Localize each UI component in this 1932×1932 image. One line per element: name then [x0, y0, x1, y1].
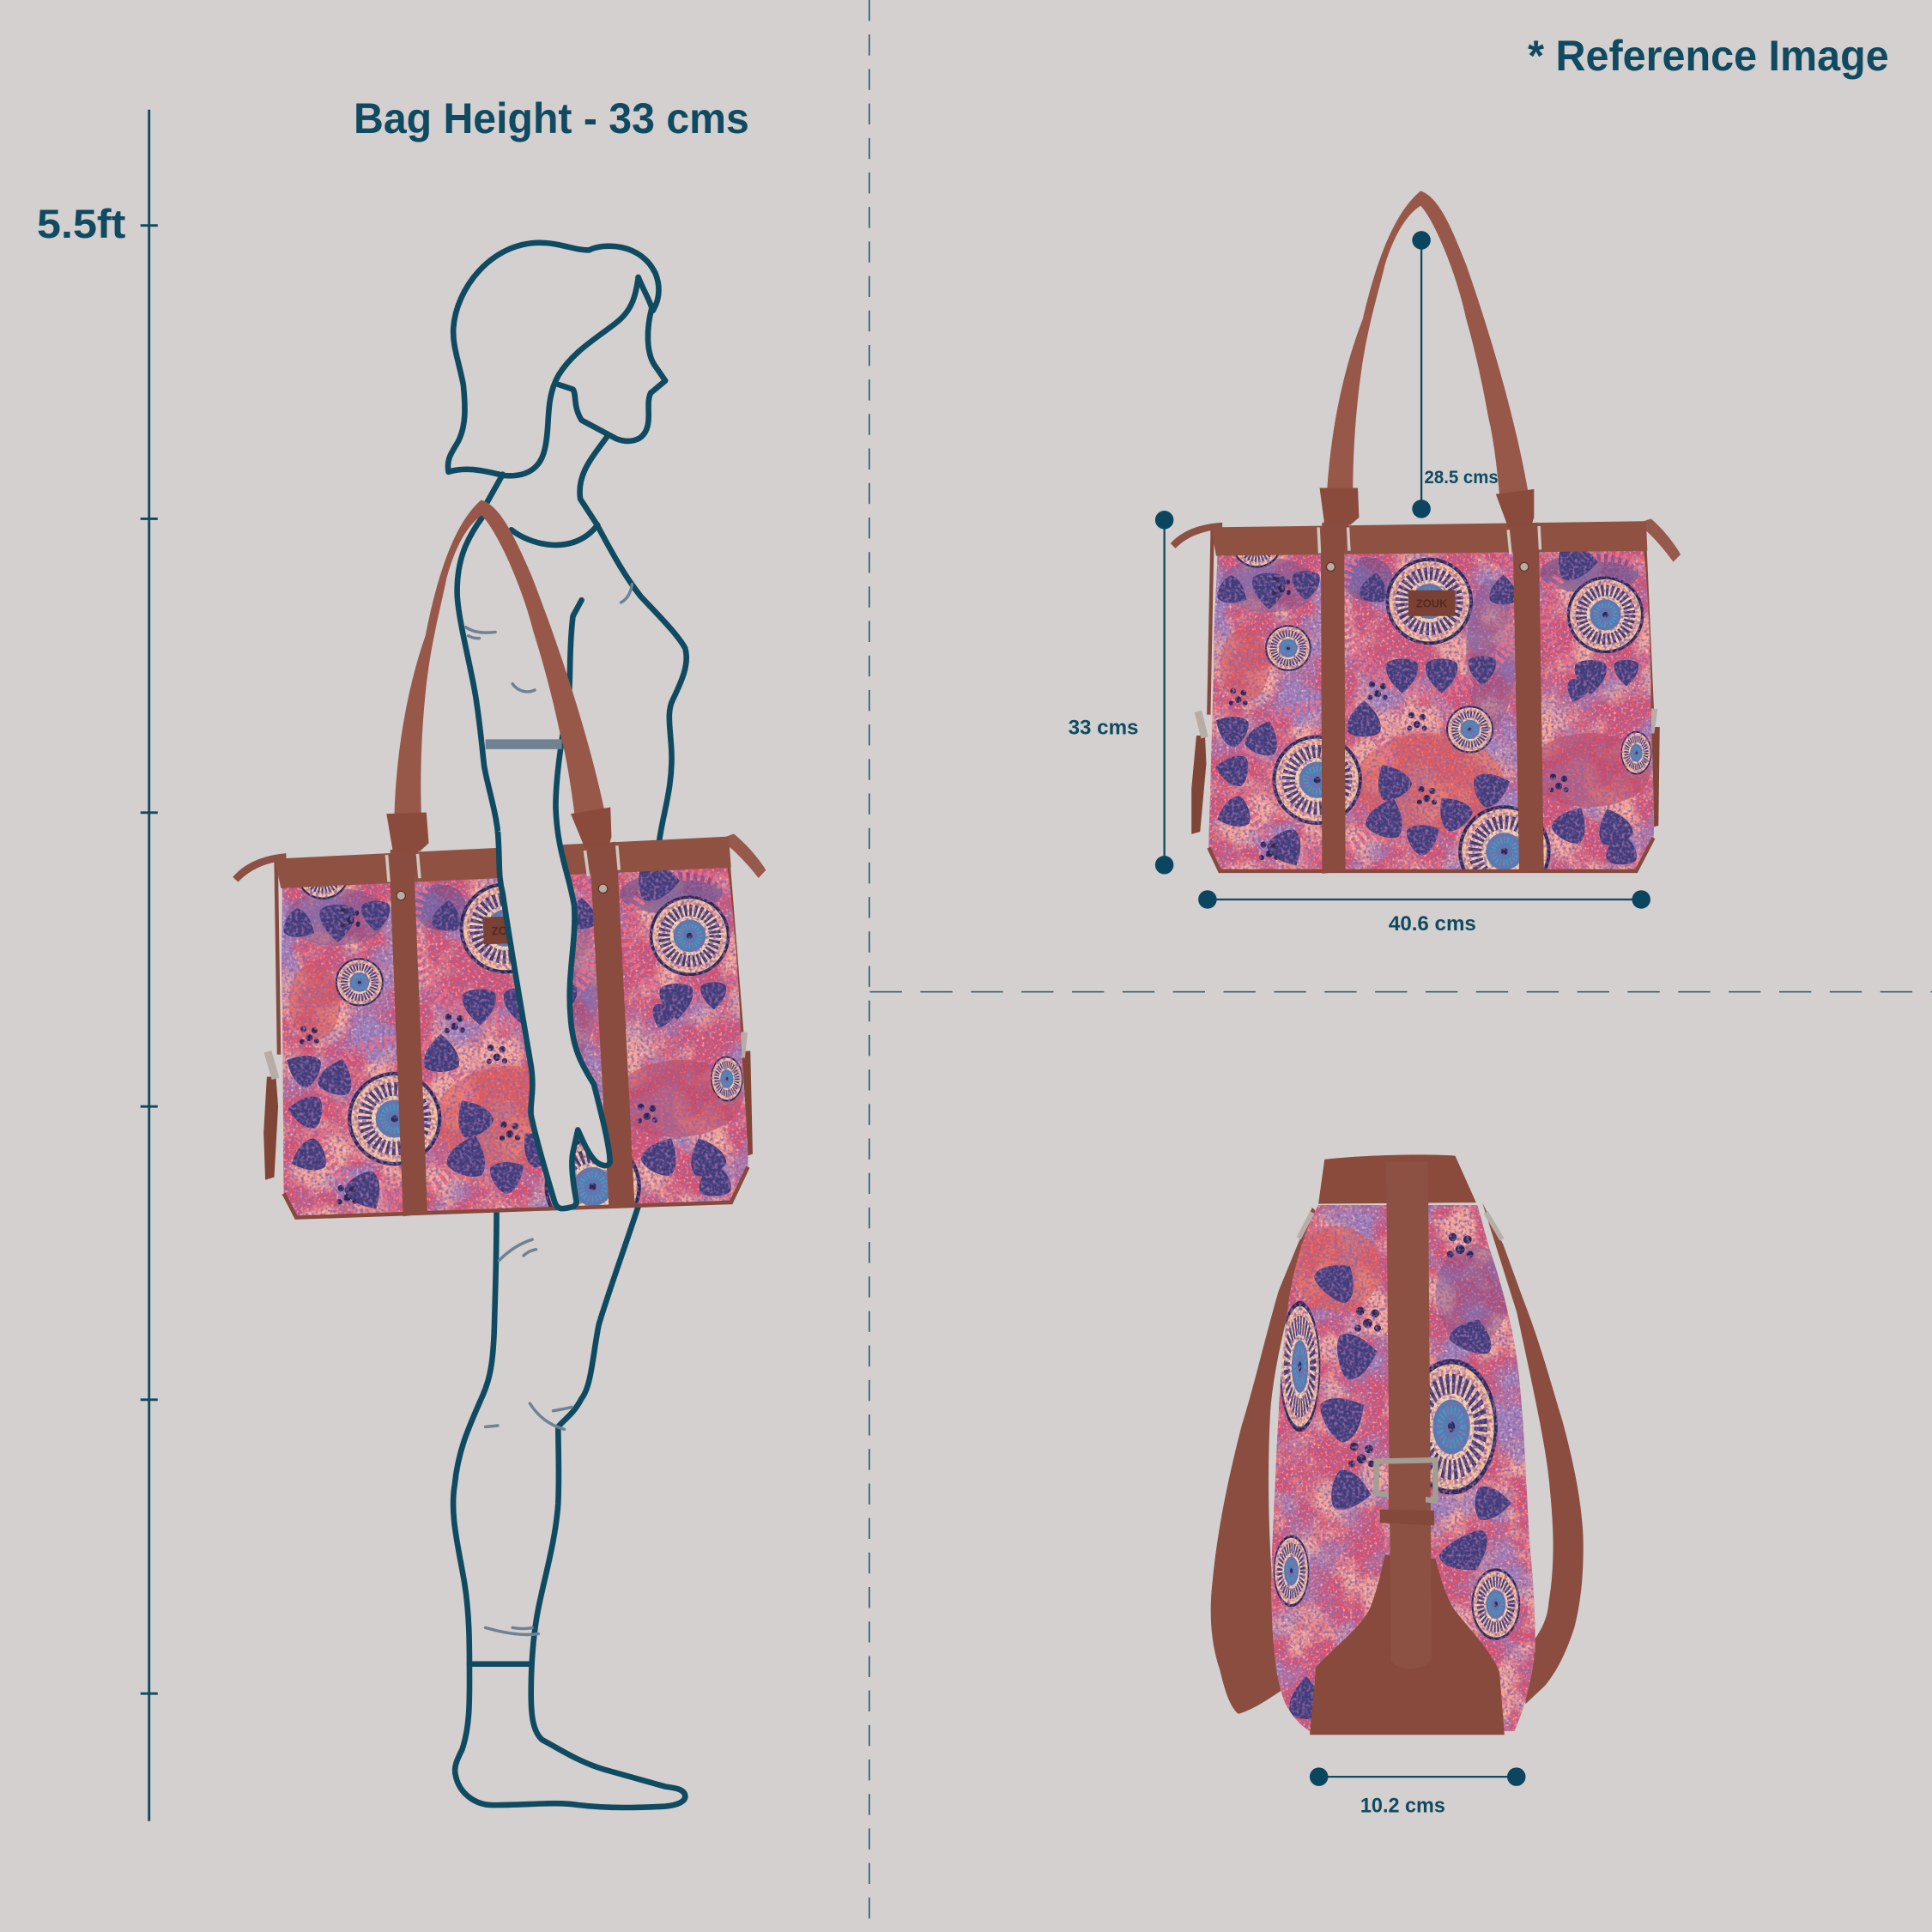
leather collar	[1318, 1154, 1476, 1204]
leather base corner	[1310, 1555, 1505, 1735]
brand label	[1408, 591, 1455, 616]
height label 5.5ft: 5.5ft	[37, 202, 126, 247]
side tabs and buckles	[1191, 708, 1660, 834]
vertical straps	[1321, 523, 1544, 874]
bag handles	[1327, 191, 1528, 495]
dimension: height 33 cms	[1069, 511, 1173, 875]
dimension: depth 10.2 cms	[1310, 1767, 1526, 1818]
dimension: width 40.6 cms: 40.6 cms	[1389, 912, 1476, 936]
strap rings	[1299, 1213, 1502, 1239]
fabric colour washes	[1220, 512, 1664, 854]
horizontal dashed divider	[870, 991, 1932, 993]
side fabric motifs	[1274, 1226, 1519, 1719]
tote bag carried on the shoulder	[220, 490, 778, 1245]
vertical dashed divider	[869, 0, 870, 1932]
left zipper pull	[1171, 523, 1222, 548]
side fabric panel	[1263, 1196, 1547, 1737]
D-rings	[1318, 526, 1540, 554]
heading: bag height: Bag Height - 33 cms	[354, 94, 749, 142]
arm overlapping the bag	[498, 807, 610, 1208]
rivets	[1326, 562, 1529, 571]
side view of the bag	[1211, 1154, 1584, 1737]
bottom edge	[1208, 838, 1654, 871]
human figure outline	[448, 243, 687, 1808]
central strap	[1386, 1162, 1432, 1669]
buckle	[1377, 1460, 1435, 1525]
dimension: width 40.6 cms	[1198, 890, 1650, 936]
dimension: handle drop 28.5 cms: 28.5 cms	[1425, 467, 1499, 488]
strap tabs	[1320, 488, 1534, 527]
patterned fabric panel	[1202, 512, 1664, 896]
top trim band	[1211, 521, 1647, 555]
dimension: height 33 cms: 33 cms	[1069, 717, 1138, 740]
right zipper pull	[1640, 518, 1681, 562]
left side handle	[1211, 1208, 1318, 1714]
height ruler	[141, 110, 158, 1821]
leaf motifs	[1208, 543, 1638, 874]
dimension: depth 10.2 cms: 10.2 cms	[1360, 1795, 1445, 1818]
side piping	[1208, 530, 1652, 715]
front view tote bag	[1171, 191, 1681, 896]
brand label: ZOUK	[1416, 597, 1448, 610]
note: reference image: * Reference Image	[1528, 32, 1889, 80]
dimension: handle drop 28.5 cms	[1412, 231, 1499, 518]
right side handle	[1482, 1202, 1584, 1704]
figure shading marks	[466, 584, 632, 1635]
mandala motifs	[1232, 518, 1651, 896]
